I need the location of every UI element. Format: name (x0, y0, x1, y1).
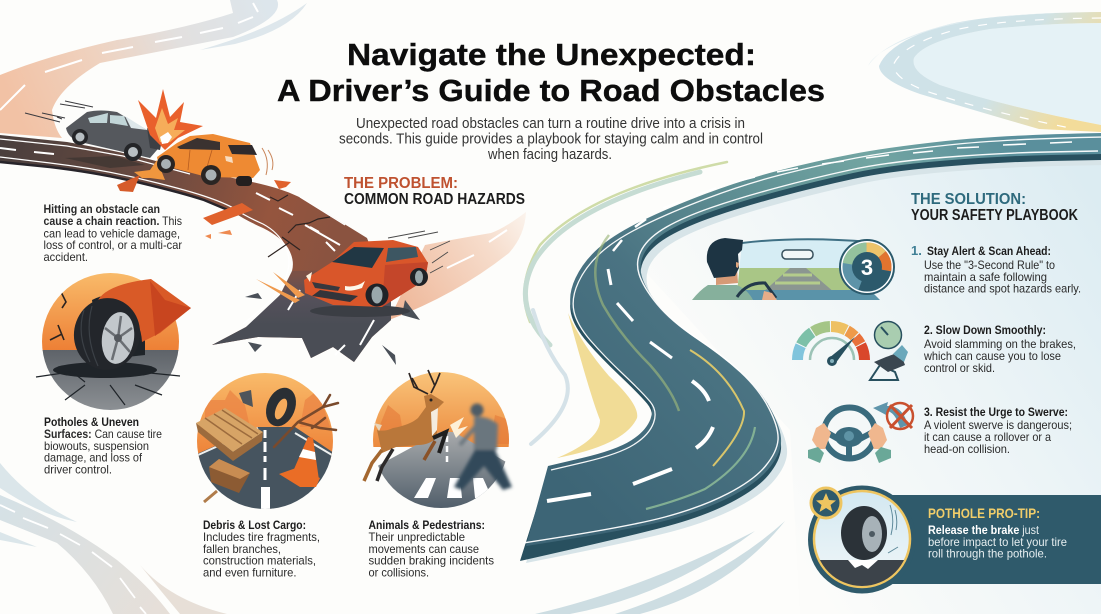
text: potholes: Surfaces: Can cause tire (44, 427, 162, 441)
text: potholes (44, 415, 162, 476)
decorative road: lower left ghost (0, 463, 227, 614)
text: chain reaction: can lead to vehicle damage, (44, 226, 180, 240)
text: chain reaction: accident. (44, 250, 88, 264)
icon: driver view with 3-second dial: 3 (861, 255, 873, 280)
step 1 text (911, 243, 1081, 296)
text: debris (203, 518, 320, 580)
heading: the problem: THE PROBLEM: (344, 175, 458, 192)
icon: pothole tire (36, 270, 191, 412)
heading: the solution (911, 191, 1079, 224)
title (277, 37, 825, 108)
step 1 text: Use the "3-Second Rule" to (924, 258, 1055, 272)
orange hatchback car (157, 134, 273, 186)
text: animals: Their unpredictable (368, 530, 465, 544)
decorative road: upper left peach (0, 0, 307, 138)
step 1 text: maintain a safe following (924, 270, 1047, 284)
background: pale blue solution zone (640, 150, 1101, 614)
center lane dashes (547, 142, 1072, 501)
grey crashed car (25, 101, 163, 161)
step 3 text: it can cause a rollover or a (924, 430, 1051, 444)
step 3 text (924, 405, 1072, 456)
icon: deer and pedestrian (364, 370, 520, 510)
intro text (339, 116, 763, 163)
decorative road: upper right oval (868, 12, 1101, 132)
text: chain reaction: loss of control, or a multi-car (44, 238, 182, 252)
step 1 text: distance and spot hazards early. (924, 282, 1081, 296)
text: animals: or collisions. (368, 566, 429, 580)
swooshes below main road (535, 521, 785, 614)
step 3 text: head-on collision. (924, 442, 1010, 456)
icon: speed gauge and brake pedal (798, 322, 908, 380)
intro text: Unexpected road obstacles can turn a routine drive into a crisis in (356, 116, 745, 132)
step 2 text: Avoid slamming on the brakes, (924, 337, 1076, 351)
step 2 text: control or skid. (924, 361, 995, 375)
intro text: seconds. This guide provides a playbook for staying calm and in control (339, 132, 763, 148)
step 2 text: 2. Slow Down Smoothly: (924, 323, 1046, 337)
text: debris: and even furniture. (203, 566, 296, 580)
icon: driver view with 3-second dial (692, 238, 894, 300)
text: debris: construction materials, (203, 554, 316, 568)
panel: pothole pro-tip (808, 486, 1101, 595)
text: animals (368, 518, 494, 580)
pro-tip text: roll through the pothole. (928, 546, 1047, 560)
text: animals: sudden braking incidents (368, 554, 494, 568)
text: debris: Includes tire fragments, (203, 530, 320, 544)
pro-tip text (928, 505, 1067, 560)
red sedan car (256, 231, 450, 317)
step 1 text: Stay Alert & Scan Ahead: (927, 244, 1051, 258)
pro-tip text: before impact to let your tire (928, 535, 1067, 549)
decorative swooshes left of main road (524, 162, 727, 458)
asphalt chips (117, 175, 420, 365)
text: debris: fallen branches, (203, 542, 281, 556)
title: Navigate the Unexpected: (347, 37, 756, 72)
cracked hazard road (0, 135, 391, 362)
icon: star badge (811, 488, 841, 518)
text: chain reaction (44, 202, 182, 264)
text: chain reaction: cause a chain reaction. This (44, 214, 182, 228)
step 2 text (923, 323, 1076, 375)
text: potholes: damage, and loss of (44, 450, 143, 464)
heading: the problem: COMMON ROAD HAZARDS (344, 191, 525, 208)
main teal road (520, 133, 1101, 563)
intro text: when facing hazards. (487, 147, 612, 163)
step 2 text: which can cause you to lose (923, 349, 1061, 363)
peach road trailing the red car (389, 212, 526, 320)
text: potholes: driver control. (44, 462, 112, 476)
step 3 text: A violent swerve is dangerous; (924, 418, 1072, 432)
icon: steering wheel and no-swerve sign (808, 402, 913, 463)
text: animals: Animals & Pedestrians: (368, 518, 485, 532)
heading: the problem (344, 175, 525, 208)
pro-tip text: Release the brake just (928, 523, 1040, 537)
step 3 text: 3. Resist the Urge to Swerve: (924, 405, 1068, 419)
text: potholes: Potholes & Uneven (44, 415, 139, 429)
road paint streaks (595, 235, 679, 411)
pro-tip text: POTHOLE PRO-TIP: (928, 505, 1040, 521)
text: chain reaction: Hitting an obstacle can (44, 202, 160, 216)
heading: the solution: THE SOLUTION: (911, 191, 1026, 208)
icon: debris (190, 370, 340, 510)
text: potholes: biowouts, suspension (44, 439, 149, 453)
text: animals: movements can cause (368, 542, 479, 556)
explosion (134, 89, 203, 180)
title: A Driver’s Guide to Road Obstacles (277, 73, 825, 108)
step 1 text: 1. (911, 243, 922, 258)
text: debris: Debris & Lost Cargo: (203, 518, 306, 532)
icon: tire in pothole (820, 504, 904, 586)
